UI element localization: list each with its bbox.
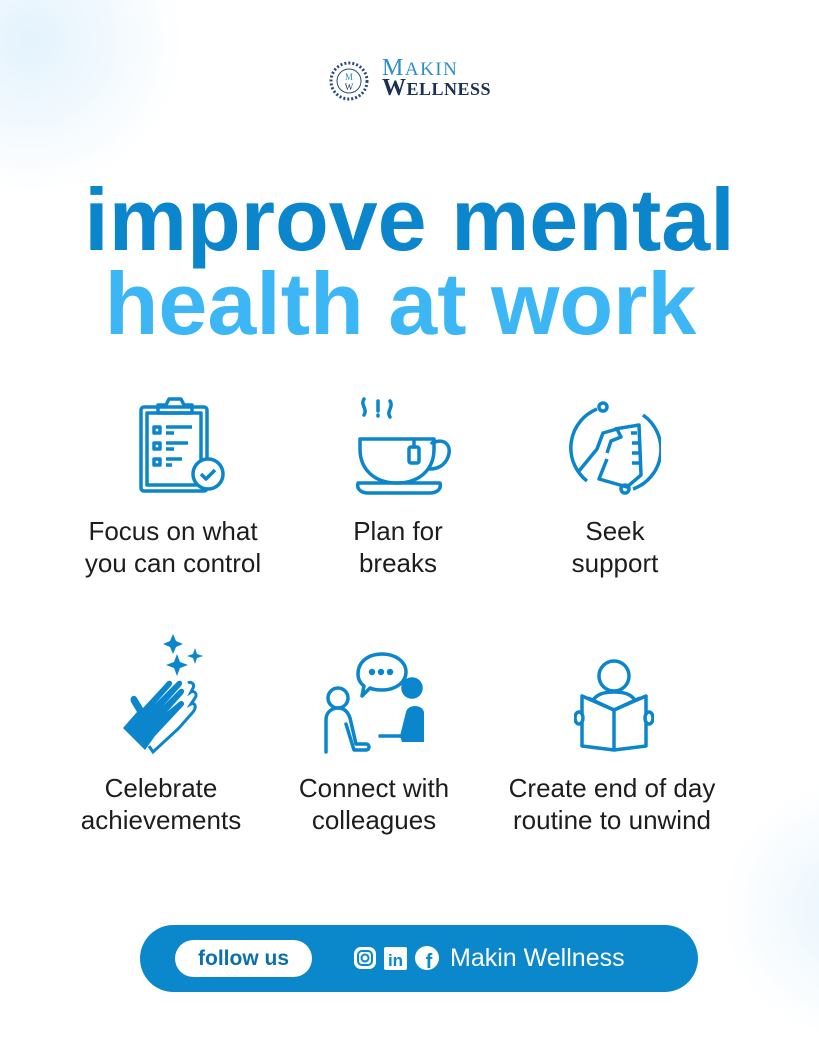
follow us button: follow us xyxy=(198,947,289,970)
title: improve mental xyxy=(84,170,735,269)
item: breaks xyxy=(353,397,451,578)
icon: helping hands xyxy=(569,401,661,495)
label: Celebrate xyxy=(105,773,217,803)
logo emblem xyxy=(330,62,368,100)
label xyxy=(572,516,658,578)
follow us button xyxy=(175,940,312,977)
icon: clapping hands xyxy=(123,634,203,754)
footer bar xyxy=(140,925,698,992)
label: Connect with xyxy=(299,773,449,803)
label: Seek xyxy=(585,516,645,546)
label: breaks xyxy=(359,548,437,578)
title: health at work xyxy=(105,254,696,353)
logo emblem: W xyxy=(345,82,354,92)
logo xyxy=(330,55,491,101)
icon: two people talking xyxy=(324,652,424,754)
logo text: MAKIN xyxy=(382,55,458,81)
label: colleagues xyxy=(312,805,436,835)
item: connect xyxy=(299,652,449,835)
social icons: f xyxy=(426,951,433,973)
label: you can control xyxy=(85,548,261,578)
label xyxy=(81,773,241,835)
item: routine xyxy=(509,659,716,835)
footer text: Makin Wellness xyxy=(450,944,625,972)
label: Create end of day xyxy=(509,773,715,803)
label xyxy=(509,773,716,835)
icon: clipboard xyxy=(139,397,225,493)
label: routine to unwind xyxy=(513,805,711,835)
social icons xyxy=(354,946,439,973)
label xyxy=(299,773,449,835)
label xyxy=(353,516,443,578)
label: Focus on what xyxy=(88,516,258,546)
label: Plan for xyxy=(353,516,443,546)
background glow top-left xyxy=(0,0,180,200)
label: support xyxy=(572,548,658,578)
logo emblem: M xyxy=(345,72,353,82)
icon: tea cup xyxy=(356,397,451,495)
icon: person reading xyxy=(574,659,654,752)
item: support xyxy=(569,401,661,578)
item: focus xyxy=(85,397,261,578)
background glow bottom-right xyxy=(720,780,819,1040)
logo: WELLNESS xyxy=(382,75,491,101)
item: celebrate xyxy=(81,634,241,835)
label: achievements xyxy=(81,805,241,835)
title xyxy=(84,170,735,353)
social icons: in xyxy=(388,951,403,970)
label xyxy=(85,516,261,578)
